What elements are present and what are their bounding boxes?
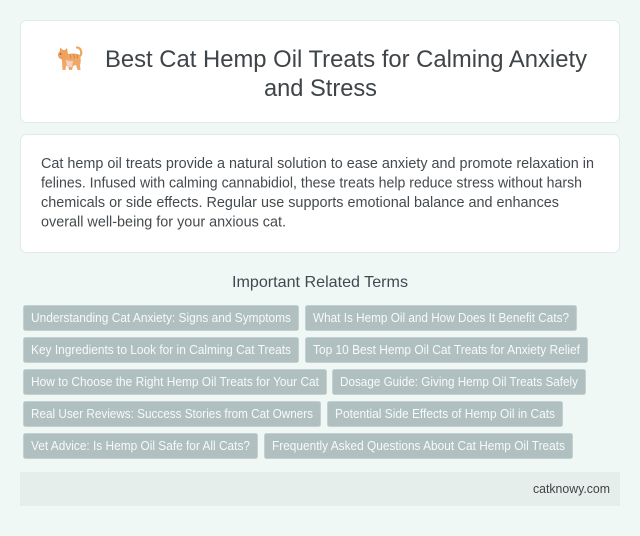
text block: introduction: Cat hemp oil treats provide a natural solution to ease anxiety and promote relaxation in (41, 156, 594, 172)
tag (24, 338, 298, 362)
tag: Frequently Asked Questions About Cat Hemp Oil Treats (272, 439, 565, 453)
text block: introduction (41, 156, 594, 230)
title (105, 46, 588, 102)
footer source: catknowy.com (533, 482, 610, 496)
panel: introduction (20, 134, 620, 252)
tag: Key Ingredients to Look for in Calming Cat Treats (31, 343, 291, 357)
title: Best Cat Hemp Oil Treats for Calming Anxiety (105, 46, 588, 73)
text block: introduction: overall well-being for your anxious cat. (41, 214, 286, 230)
tag: How to Choose the Right Hemp Oil Treats for Your Cat (31, 375, 319, 389)
tag (264, 434, 572, 458)
tag (24, 370, 326, 394)
text block: introduction: chemicals or side effects. Regular use supports emotional balance and enhances (41, 195, 559, 211)
tag (328, 402, 562, 426)
tag (24, 434, 258, 458)
title: and Stress (264, 75, 377, 102)
tag: Dosage Guide: Giving Hemp Oil Treats Safely (340, 375, 579, 389)
tag: Understanding Cat Anxiety: Signs and Symptoms (31, 311, 291, 325)
tag (24, 402, 320, 426)
tag list (24, 306, 588, 458)
tag: Top 10 Best Hemp Oil Cat Treats for Anxiety Relief (313, 343, 580, 357)
text block: introduction: felines. Infused with calming cannabidiol, these treats help reduce stress without harsh (41, 176, 582, 192)
tag: Real User Reviews: Success Stories from Cat Owners (31, 407, 313, 421)
tag (306, 306, 576, 330)
tag (306, 338, 588, 362)
panel: title card (20, 20, 620, 122)
tag: Potential Side Effects of Hemp Oil in Cats (335, 407, 555, 421)
tag: Vet Advice: Is Hemp Oil Safe for All Cats? (31, 439, 250, 453)
icon: cat (58, 48, 81, 70)
tag: What Is Hemp Oil and How Does It Benefit Cats? (313, 311, 569, 325)
tag (332, 370, 586, 394)
tag (24, 306, 298, 330)
heading: related terms: Important Related Terms (232, 274, 408, 291)
footer (20, 472, 620, 506)
